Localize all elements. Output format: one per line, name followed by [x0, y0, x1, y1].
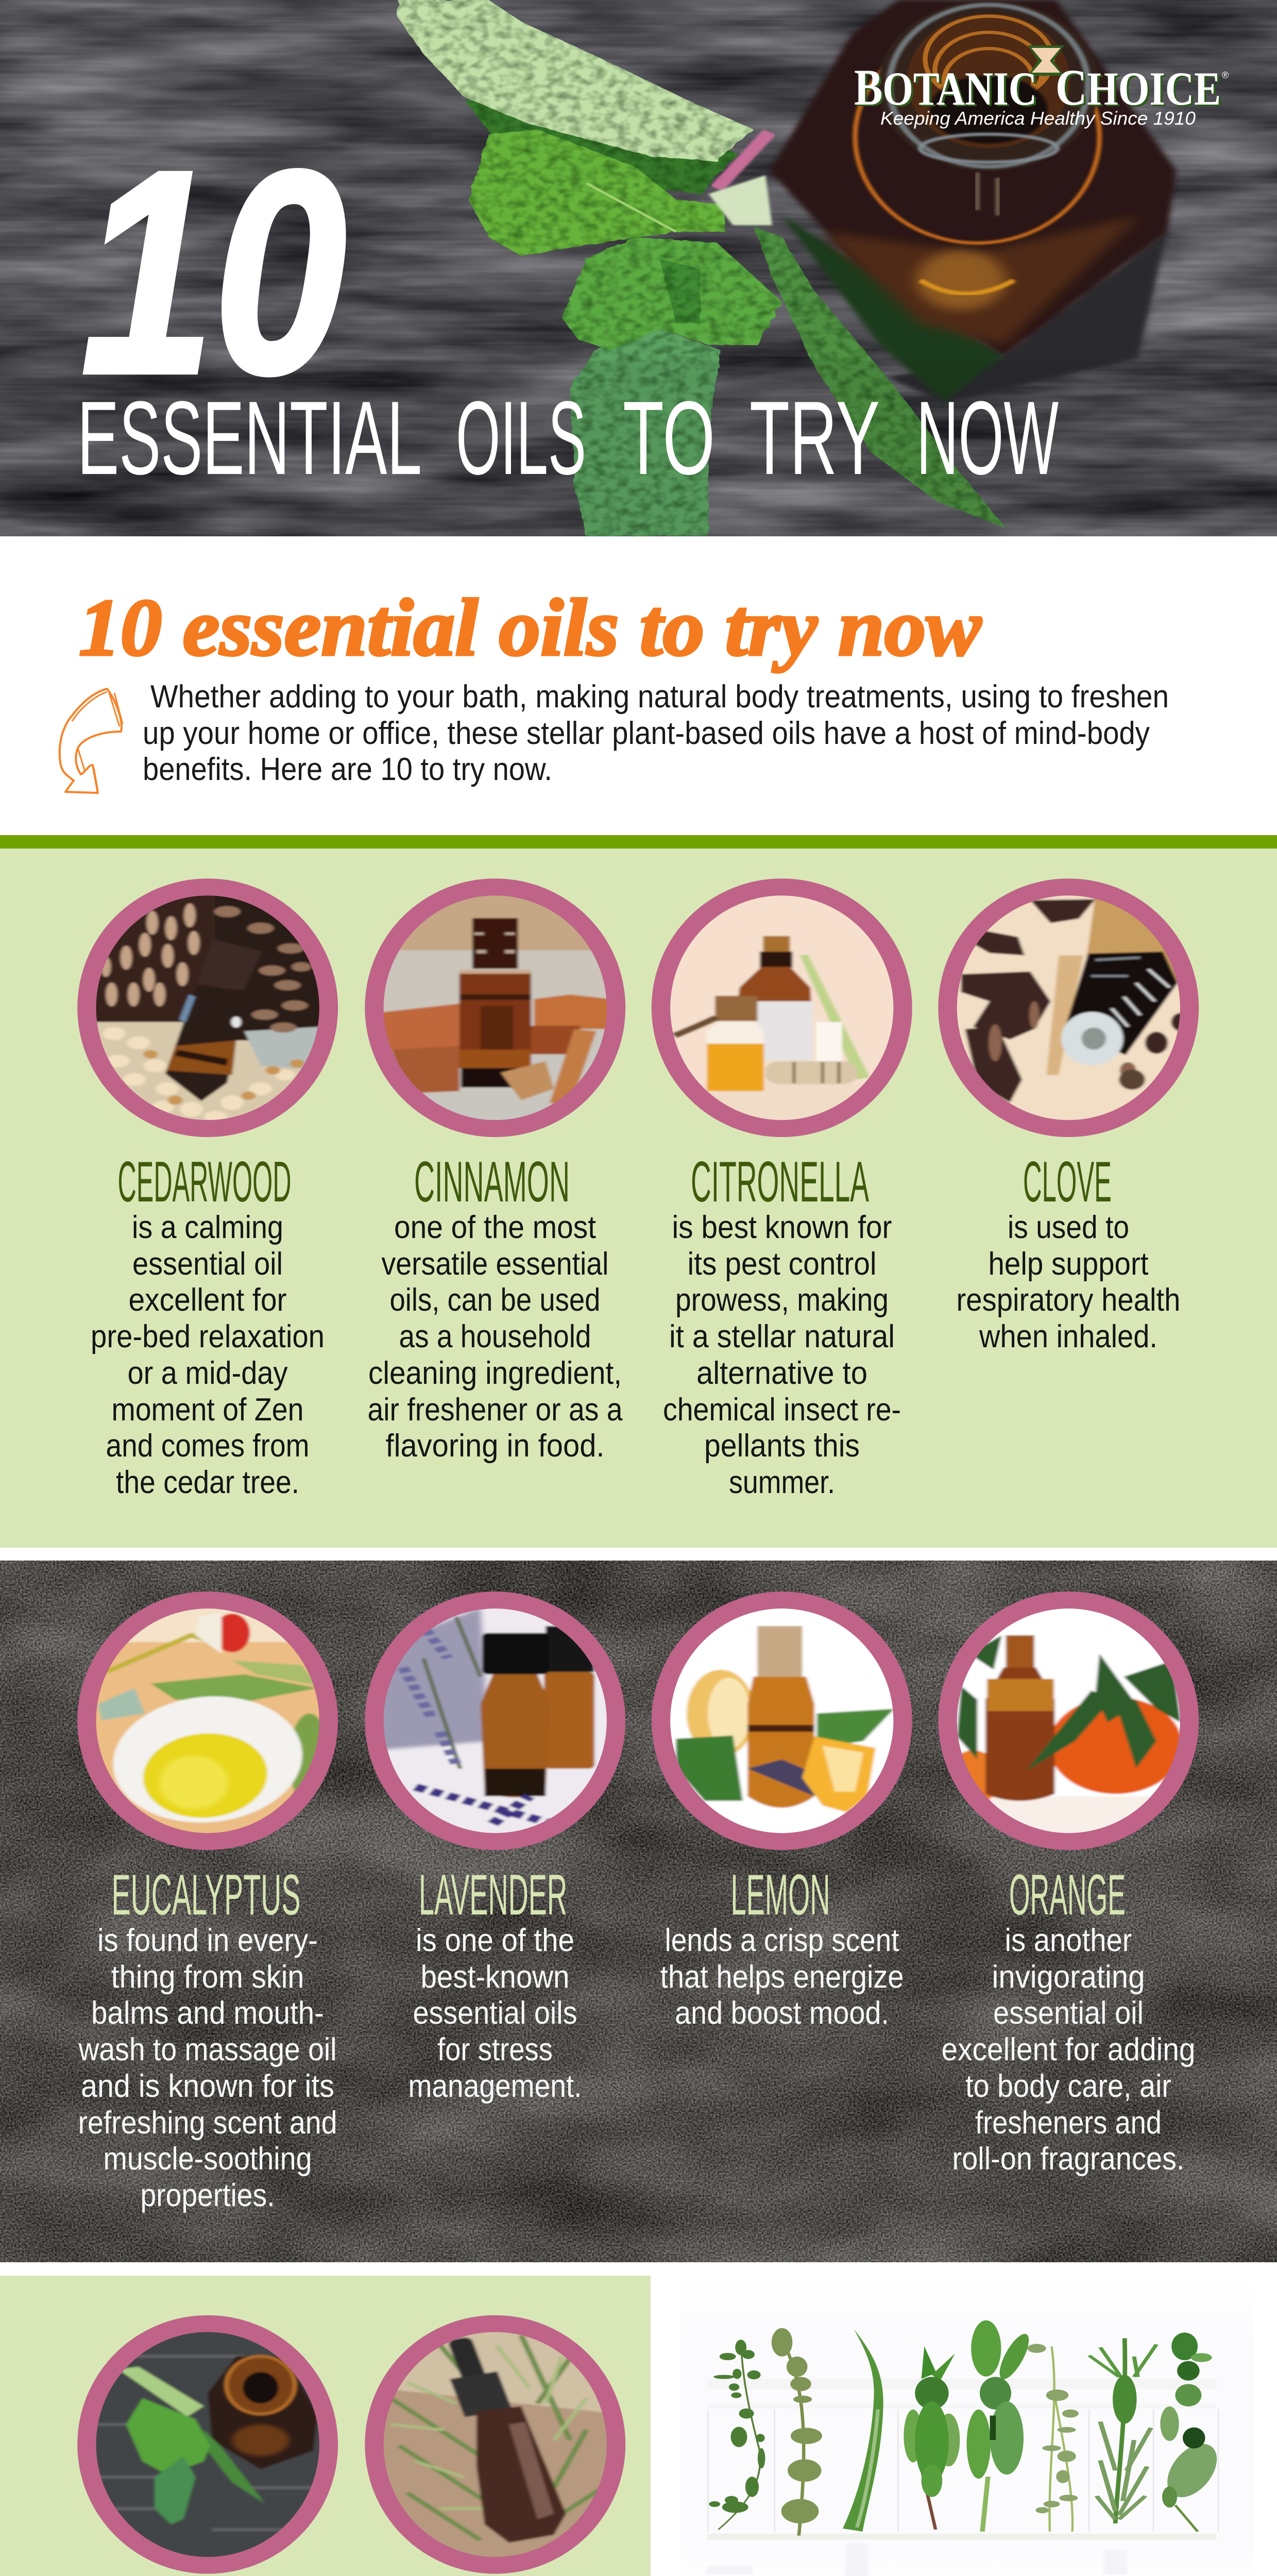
hero title: NOW [916, 380, 1059, 497]
oil: cinnamon: cleaning ingredient, [368, 1355, 622, 1391]
heading: 10 essential oils to try now: 10 essential oils to try now [79, 583, 982, 673]
oil: cinnamon: air freshener or as a [368, 1392, 623, 1428]
photo: lemon [660, 1605, 904, 1835]
oil: lemon: and boost mood. [675, 1995, 889, 2031]
oil: eucalyptus [78, 1863, 337, 2213]
oil: orange: ORANGE [1009, 1863, 1126, 1927]
oil: eucalyptus: balms and mouth- [91, 1995, 324, 2031]
photo: cinnamon [374, 891, 619, 1125]
oil: citronella: pellants this [704, 1428, 860, 1464]
photo: citronella [660, 891, 904, 1126]
oil: lavender: is one of the [416, 1923, 574, 1958]
panel: row two oils on slate [0, 1561, 1277, 2262]
oil: citronella: alternative to [696, 1355, 867, 1391]
oil: cedarwood: excellent for [129, 1282, 286, 1318]
hero title: TRY [750, 380, 880, 497]
intro text: up your home or office, these stellar plant-based oils have a host of mind-body [143, 716, 1150, 751]
oil: cedarwood: pre-bed relaxation [91, 1319, 325, 1354]
hero title: TO [623, 380, 715, 497]
divider bar top [0, 835, 1277, 849]
icon: row two round photos [77, 1591, 1199, 1850]
plant 3 aloe [843, 2329, 883, 2532]
logo: Botanic Choice header: ® [1222, 70, 1229, 80]
oil: eucalyptus: wash to massage oil [78, 2032, 337, 2067]
oil: citronella [663, 1150, 901, 1500]
panel: row one oils [0, 849, 1277, 1548]
oil: clove: respiratory health [956, 1282, 1181, 1318]
photo: clove [949, 891, 1193, 1126]
oil: cedarwood: is a calming [132, 1210, 283, 1245]
oil: eucalyptus: properties. [140, 2178, 275, 2213]
oil: cinnamon: versatile essential [381, 1246, 609, 1282]
icon: mortar [1028, 45, 1064, 76]
hero numeral: 10 [81, 111, 346, 433]
plant 4 [904, 2346, 960, 2530]
oil: lemon: lends a crisp scent [665, 1923, 899, 1958]
oil: eucalyptus: muscle-soothing [103, 2141, 312, 2177]
oil: lavender [408, 1863, 582, 2104]
icon: row one round photos [77, 878, 1199, 1137]
plant 8 [1158, 2332, 1226, 2532]
intro text: Whether adding to your bath, making natural body treatments, using to freshen [150, 679, 1169, 715]
plant 2 [772, 2328, 822, 2536]
oil: citronella: chemical insect re- [663, 1392, 901, 1428]
oil: orange [942, 1863, 1195, 2177]
panel: quality counts photo of herbs [680, 2277, 1253, 2576]
photo: rosemary [374, 2327, 619, 2561]
oil: cinnamon: flavoring in food. [385, 1428, 605, 1464]
oil: orange: is another [1004, 1923, 1132, 1958]
oil: lavender: best-known [420, 1959, 570, 1995]
oil: cedarwood: essential oil [132, 1246, 283, 1282]
intro text [143, 679, 1169, 787]
oil: lavender: management. [408, 2069, 582, 2104]
oil: clove: when inhaled. [979, 1319, 1157, 1354]
icon: row three round photos [77, 2315, 625, 2574]
oil: citronella: it a stellar natural [669, 1319, 895, 1354]
oil: clove: CLOVE [1023, 1150, 1112, 1214]
panel: row three oils [0, 2276, 651, 2576]
oil: eucalyptus: refreshing scent and [78, 2105, 337, 2141]
oil: cinnamon: one of the most [394, 1210, 596, 1245]
hero title [77, 380, 1059, 497]
oil: orange: essential oil [993, 1995, 1144, 2031]
oil: cedarwood: or a mid-day [128, 1355, 287, 1391]
oil: citronella: its pest control [687, 1246, 877, 1282]
photo: orange [947, 1605, 1193, 1835]
logo: Botanic Choice header: BOTANIC [854, 59, 1037, 116]
oil: cedarwood: moment of Zen [111, 1392, 304, 1428]
logo: Botanic Choice header: CHOICE [1055, 59, 1221, 116]
logo: Botanic Choice header: Keeping America Healthy Since 1910 [880, 108, 1196, 129]
oil: cedarwood: and comes from [106, 1428, 309, 1464]
oil: cinnamon [368, 1150, 623, 1464]
oil: clove [956, 1150, 1181, 1354]
oil: cedarwood: CEDARWOOD [117, 1150, 292, 1214]
oil: lemon: LEMON [730, 1863, 830, 1927]
oil: clove: is used to [1008, 1210, 1129, 1245]
oil: clove: help support [988, 1246, 1149, 1282]
photo: lavender [374, 1605, 619, 1835]
oil: eucalyptus: is found in every- [97, 1923, 318, 1958]
oil: citronella: summer. [729, 1465, 835, 1500]
oil: orange: fresheners and [975, 2105, 1162, 2141]
plant 1 [709, 2340, 765, 2530]
oil: cedarwood: the cedar tree. [116, 1465, 299, 1500]
plant 7 [1089, 2338, 1156, 2523]
oil: orange: invigorating [992, 1959, 1145, 1995]
oil: cinnamon: CINNAMON [414, 1150, 570, 1214]
oil: cinnamon: oils, can be used [389, 1282, 601, 1318]
oil: cinnamon: as a household [399, 1319, 591, 1354]
oil: eucalyptus: EUCALYPTUS [111, 1863, 301, 1927]
intro text: benefits. Here are 10 to try now. [143, 752, 552, 787]
oil: eucalyptus: and is known for its [81, 2069, 334, 2104]
oil: orange: to body care, air [965, 2069, 1171, 2104]
icon: hand-drawn arrow [60, 689, 123, 793]
hero title: OILS [456, 380, 586, 497]
plant 6 [1027, 2344, 1079, 2532]
oil: citronella: prowess, making [675, 1282, 889, 1318]
oil: lavender: for stress [437, 2032, 553, 2067]
oil: orange: roll-on fragrances. [952, 2141, 1185, 2177]
oil: lemon [660, 1863, 904, 2031]
oil: cedarwood [91, 1150, 325, 1500]
oil: lemon: that helps energize [660, 1959, 904, 1995]
photo: cedarwood [81, 891, 334, 1126]
panel: hero photo [0, 0, 1277, 536]
oil: citronella: is best known for [672, 1210, 892, 1245]
oil: orange: excellent for adding [942, 2032, 1195, 2067]
oil: lavender: essential oils [413, 1995, 577, 2031]
oil: lavender: LAVENDER [419, 1863, 567, 1927]
hero title: ESSENTIAL [77, 380, 422, 497]
oil: citronella: CITRONELLA [691, 1150, 869, 1214]
logo: Botanic Choice header [854, 45, 1229, 129]
plant 5 [967, 2320, 1035, 2532]
icon: bottle [770, 0, 1176, 403]
photo: eucalyptus [90, 1605, 330, 1835]
icon: mint leaves [397, 0, 1006, 536]
photo: peppermint [90, 2327, 326, 2561]
oil: eucalyptus: thing from skin [111, 1959, 304, 1995]
